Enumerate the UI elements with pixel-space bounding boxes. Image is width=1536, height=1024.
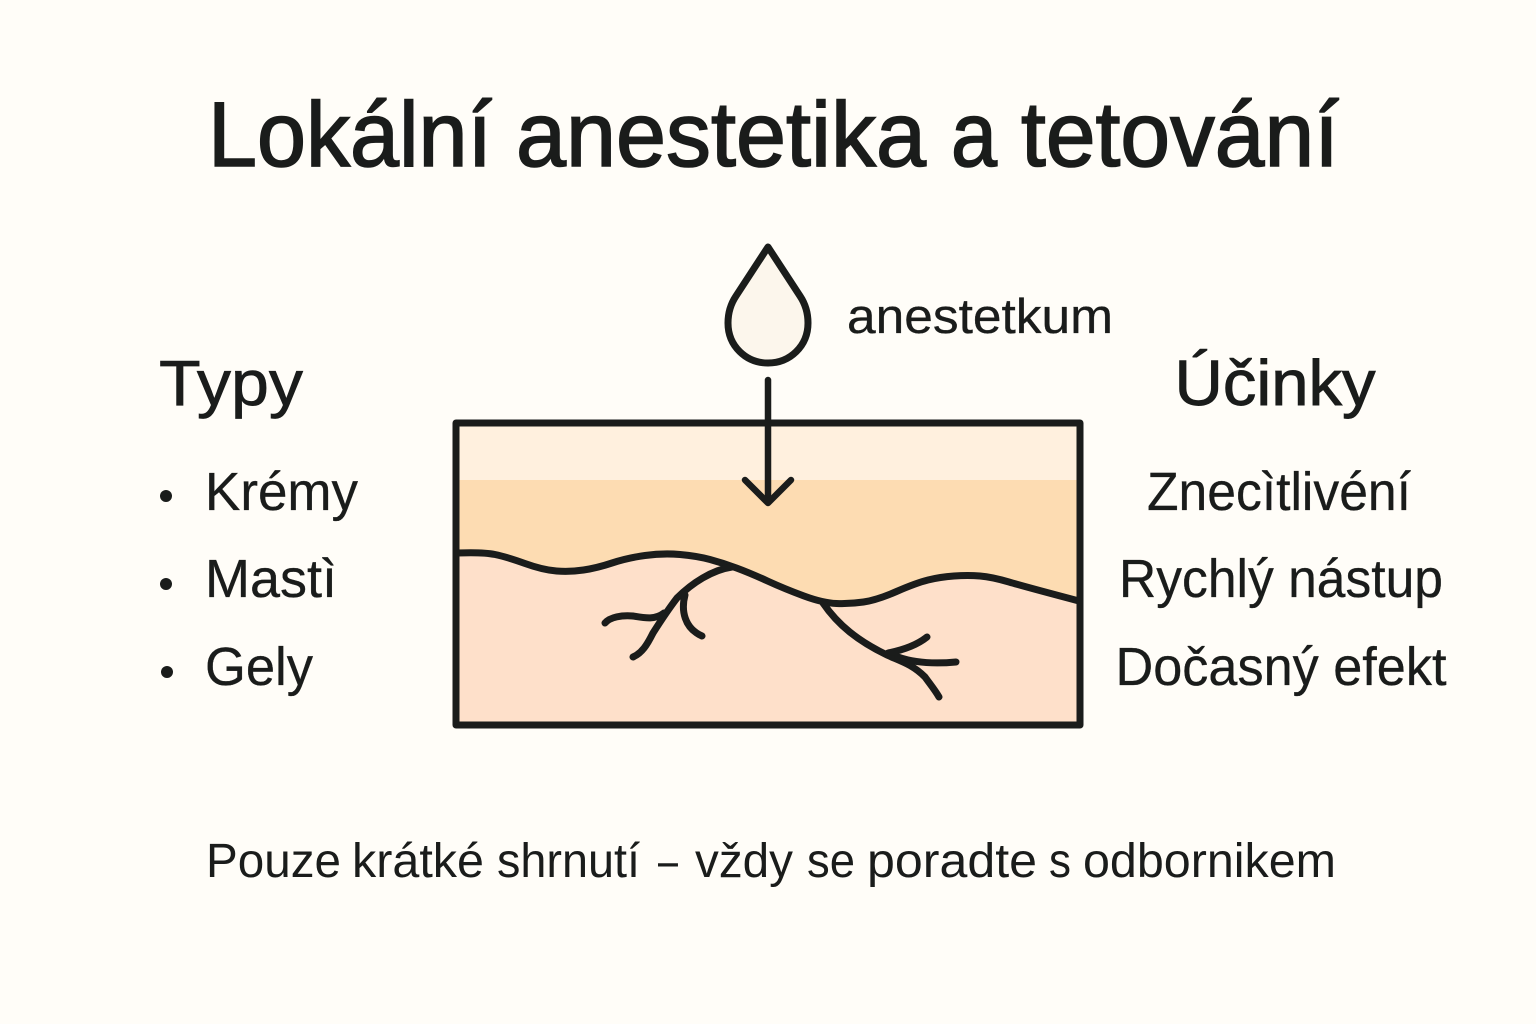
title — [208, 84, 1339, 186]
title: Lokální — [208, 84, 492, 186]
effect: numbness: Znecìtlivéní — [1147, 462, 1411, 522]
skin boundary line — [457, 553, 1079, 604]
types list item: creams: Krémy — [205, 462, 358, 522]
title: anestetika — [516, 84, 927, 186]
footer note: odbornikem — [1083, 835, 1336, 888]
title: a — [951, 84, 998, 186]
skin box outline — [456, 423, 1080, 725]
nerve branch: left — [605, 567, 732, 657]
footer note: shrnutí — [497, 835, 641, 888]
footer note — [206, 835, 1336, 888]
footer note: Pouze — [206, 835, 341, 888]
types heading: Typy — [159, 347, 303, 419]
types list item: gels: Gely — [205, 637, 313, 697]
types list item: gels — [161, 637, 313, 697]
nerve branch: right — [823, 603, 956, 697]
skin layer: dermis — [457, 480, 1079, 605]
effects heading: Účinky — [1174, 347, 1376, 419]
icon: anesthetic drop — [728, 247, 808, 363]
drop label: anestetkum — [847, 290, 1113, 344]
skin cross-section diagram — [456, 423, 1080, 725]
types list item: ointments: Mastì — [205, 549, 337, 609]
title: tetování — [1021, 84, 1339, 186]
skin layer: epidermis — [457, 424, 1079, 481]
panel: types — [159, 347, 358, 697]
footer note: – — [658, 835, 678, 888]
skin layer: lower tissue — [457, 553, 1079, 724]
effect: temporary: Dočasný efekt — [1116, 637, 1446, 697]
footer note: krátké — [352, 835, 484, 888]
arrow: penetration into skin — [745, 380, 791, 503]
footer note: s — [1049, 835, 1071, 888]
footer note: se — [807, 835, 855, 888]
effect: fast onset: Rychlý nástup — [1119, 549, 1443, 609]
footer note: poradte — [867, 835, 1037, 888]
footer note: vždy — [695, 835, 793, 888]
panel: effects — [1116, 347, 1446, 697]
